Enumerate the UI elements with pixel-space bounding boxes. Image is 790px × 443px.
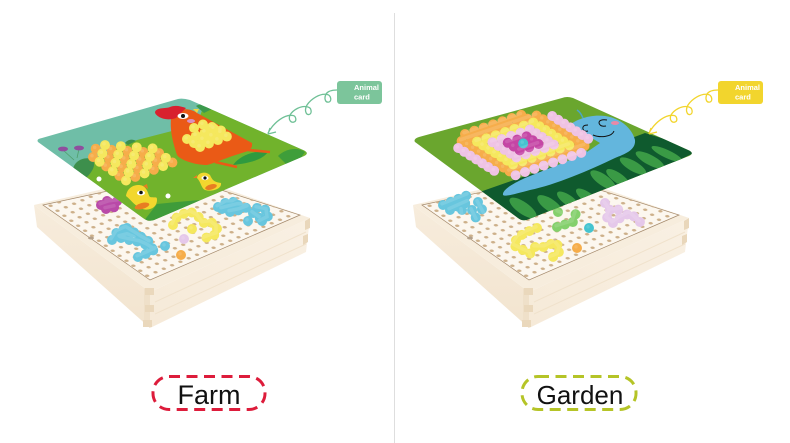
callout: farm animal card	[268, 81, 382, 134]
animal card: garden	[414, 97, 692, 220]
wooden box: farm	[34, 172, 310, 328]
callout: farm animal card: Animal	[354, 83, 379, 92]
callout: farm animal card: card	[354, 92, 370, 102]
callout: garden animal card: Animal	[735, 83, 760, 92]
animal card: farm	[38, 98, 307, 221]
label: Garden: Garden	[537, 380, 623, 410]
callout: garden animal card: card	[735, 92, 751, 102]
label: Farm: Farm	[178, 380, 240, 410]
card bead highlights	[457, 114, 587, 174]
bead highlights	[442, 194, 639, 257]
beads on farm board	[101, 198, 268, 257]
chicks	[126, 185, 157, 210]
snail	[503, 116, 635, 196]
flowers	[64, 150, 79, 160]
callout: garden animal card	[649, 81, 763, 134]
center divider	[394, 13, 395, 443]
wooden box: garden	[413, 172, 689, 328]
hen	[233, 152, 268, 165]
beads on garden board	[443, 195, 640, 258]
bushes	[73, 158, 94, 178]
leaves	[510, 146, 682, 218]
beads on farm card	[93, 124, 227, 180]
bead highlights	[100, 197, 267, 256]
beads on garden card	[458, 115, 588, 175]
label: Garden	[522, 376, 636, 410]
card bead highlights	[92, 123, 226, 179]
panel: farm puzzle	[30, 81, 382, 410]
label: Farm	[153, 376, 265, 410]
panel: garden puzzle	[410, 81, 763, 410]
